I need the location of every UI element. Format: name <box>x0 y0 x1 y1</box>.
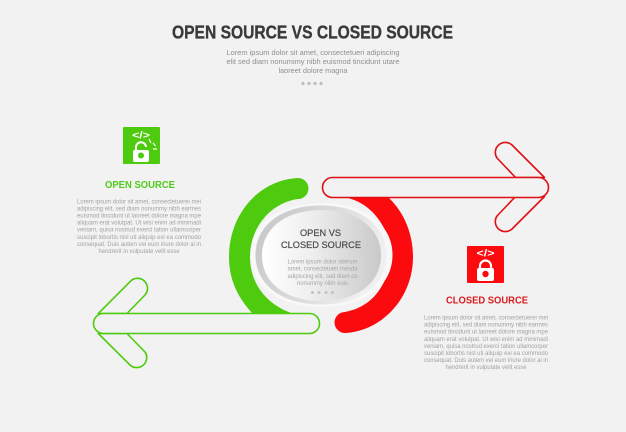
text: closed source: aliquam erat volutpat. Ut wisi enim ad minimadi <box>424 336 548 343</box>
arrow: green left <box>94 278 320 368</box>
text: open source: suscipit lobortis nisl uti aliquip exi ea commodo <box>77 234 202 241</box>
text: closed source <box>424 314 549 371</box>
text: open source: consequat. Duis autem vel eum iriure dolor ai in <box>77 241 201 248</box>
subtitle text: Lorem ipsum dolor sit amet, consectetueri adipiscing <box>226 48 400 57</box>
subtitle text: elit sed diam nonumimy nibh euismod tincidunt utare <box>226 57 400 66</box>
icon code label: </> <box>476 248 495 260</box>
text: closed source: Lorem ipsum dolor sit amet, consectetuerei mei <box>424 314 548 322</box>
text: closed source: euismod tincidunt ut laoreet dolore magna mpe <box>424 329 549 336</box>
text: closed source: consequat. Duis autem vel eum iriure dolor ai in <box>424 357 548 364</box>
text: open source: Lorem ipsum dolor sit amet, consectetuerei mei <box>77 198 201 206</box>
title: OPEN SOURCE VS CLOSED SOURCE <box>172 22 453 42</box>
text: open source: adipiscing elit, sed diam nonummy nibh earmes <box>77 206 201 212</box>
icon: open padlock <box>123 127 160 164</box>
center text: adipiscing elit, sed diam co <box>288 274 358 280</box>
text: closed source: veniam, quisa nostrud exerci tation ullamcorper <box>424 343 548 350</box>
text: open source <box>77 198 202 255</box>
center text: amet, consectetuen mesda <box>288 266 358 272</box>
arrow: red right <box>322 142 548 232</box>
text: open source: aliquam erat volutpat. Ut wisi enim ad minimadi <box>77 220 201 227</box>
text: closed source: suscipit lobortis nisl uti aliquip exi ea commodo <box>424 350 549 357</box>
center text <box>288 260 358 287</box>
center heading: CLOSED SOURCE <box>281 240 361 251</box>
center heading <box>281 228 361 251</box>
text: closed source: adipiscing elit, sed diam nonummy nibh earmes <box>424 322 548 329</box>
subtitle dots <box>301 82 323 85</box>
center text: nonummy nibh euis <box>297 281 348 287</box>
text: open source: euismod tincidunt ut laoreet dolore magna mpe <box>77 212 202 220</box>
icon code label: </> <box>132 130 150 142</box>
green arc <box>229 178 308 314</box>
subtitle text <box>226 48 400 75</box>
text: open source: hendrerit in vulputate velit esse <box>98 248 180 255</box>
center heading: OPEN VS <box>300 228 341 239</box>
center text: Lorem ipsum dolor siterum <box>288 260 358 266</box>
heading: closed source: CLOSED SOURCE <box>446 296 528 306</box>
heading: open source: OPEN SOURCE <box>105 180 175 191</box>
text: open source: veniam, quisa nostrud exerci tation ullamcorper <box>77 227 201 234</box>
center dots <box>311 291 334 294</box>
text: closed source: hendrerit in vulputate velit esse <box>446 364 527 371</box>
red arc <box>334 197 413 333</box>
center badge <box>250 203 392 307</box>
subtitle text: laoreet dolore magna <box>278 66 348 75</box>
icon: closed padlock <box>467 246 504 283</box>
